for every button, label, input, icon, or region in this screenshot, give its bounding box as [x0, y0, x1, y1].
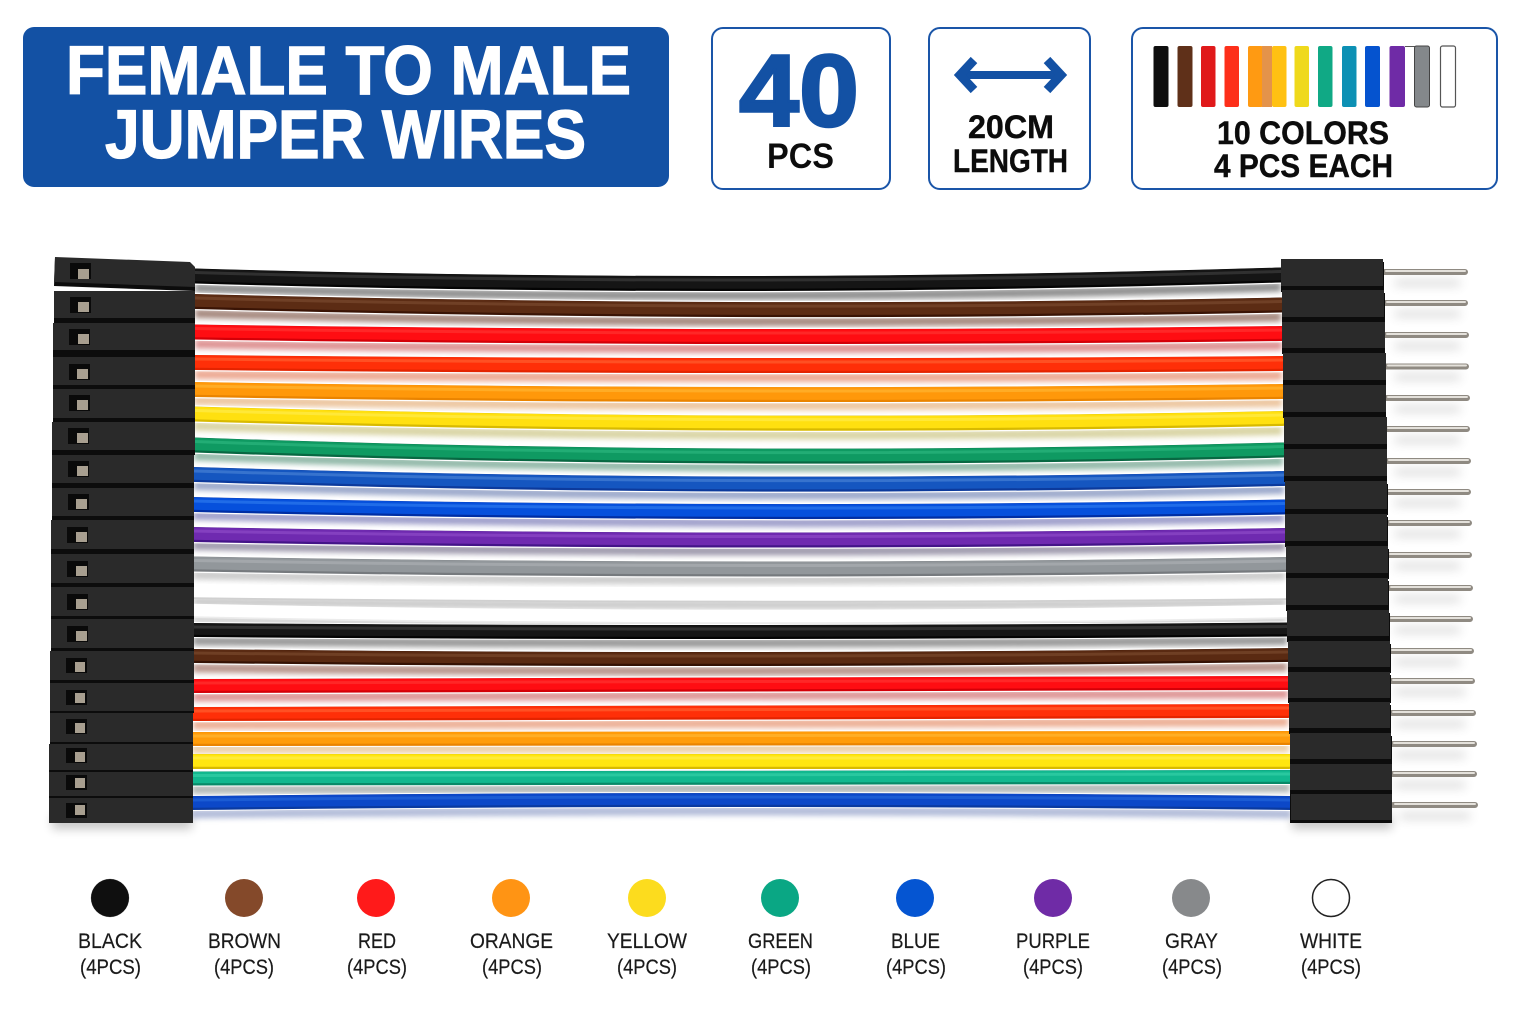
- cast shadows: [52, 283, 1470, 829]
- legend: orange: (4PCS): [482, 956, 542, 979]
- legend: brown: BROWN: [208, 930, 281, 953]
- title banner: [23, 27, 669, 187]
- legend: white: [1300, 880, 1362, 979]
- legend: yellow: (4PCS): [617, 956, 677, 979]
- legend: brown: [208, 879, 281, 979]
- wire: orange: [194, 386, 1282, 395]
- legend: white: (4PCS): [1301, 956, 1361, 979]
- connector 4: [53, 357, 195, 389]
- wire: white second: [193, 610, 1286, 617]
- wire: orange red: [195, 359, 1282, 366]
- color legend: [78, 879, 1362, 979]
- legend: brown: (4PCS): [214, 956, 274, 979]
- legend: blue: [886, 879, 946, 979]
- legend: yellow: [607, 879, 687, 979]
- legend: blue: BLUE: [891, 930, 940, 953]
- legend: green: [748, 879, 813, 979]
- connector 11: [51, 587, 194, 619]
- connector 14: [50, 683, 194, 713]
- legend: orange: ORANGE: [470, 930, 553, 953]
- legend: red: [347, 879, 407, 979]
- connector 2: [54, 291, 195, 323]
- connector 12: [51, 619, 194, 651]
- wire: blue last: [191, 797, 1291, 803]
- legend: red: RED: [358, 930, 396, 953]
- wire: gray: [193, 560, 1285, 569]
- wire: red: [195, 328, 1282, 337]
- length text: LENGTH: [953, 143, 1068, 179]
- legend: red: (4PCS): [347, 956, 407, 979]
- connector 16: [49, 744, 193, 772]
- panel: colors: [1132, 28, 1497, 189]
- colors text: 10 COLORS: [1217, 115, 1389, 151]
- colors text: 4 PCS EACH: [1214, 148, 1393, 184]
- legend: black: [78, 879, 142, 979]
- legend: orange: [470, 879, 553, 979]
- connector 10: [51, 554, 194, 587]
- legend: gray: (4PCS): [1162, 956, 1222, 979]
- wire: purple: [193, 531, 1285, 540]
- wires bundle: [191, 272, 1291, 803]
- wire: orange second: [192, 735, 1289, 739]
- panel: quantity: 40: [739, 34, 859, 148]
- wire: red second: [193, 680, 1288, 686]
- connector 3: [53, 323, 195, 357]
- connector 7: [52, 455, 194, 488]
- wire: orange red second: [193, 708, 1288, 714]
- wire: black second: [193, 626, 1287, 632]
- panel: quantity: [712, 28, 890, 189]
- wire: brown: [195, 298, 1281, 310]
- wire: green light: [192, 774, 1290, 778]
- legend: purple: PURPLE: [1016, 930, 1090, 953]
- connector 15: [50, 713, 193, 744]
- wire: green: [194, 442, 1283, 456]
- connector 17: [49, 772, 193, 798]
- wire: brown second: [193, 652, 1287, 659]
- wire: bright blue: [193, 501, 1284, 512]
- title banner: JUMPER WIRES: [105, 96, 586, 173]
- title banner: FEMALE TO MALE: [66, 32, 631, 109]
- connector 18: [49, 798, 193, 823]
- wire: white: [193, 590, 1286, 595]
- connector 13: [50, 651, 194, 683]
- connector 5: [53, 389, 195, 422]
- length text: 20CM: [968, 109, 1054, 145]
- legend: blue: (4PCS): [886, 956, 946, 979]
- male pins: [1384, 271, 1475, 805]
- wire: yellow second: [192, 758, 1289, 762]
- legend: black: BLACK: [78, 930, 142, 953]
- connector 6: [52, 422, 195, 455]
- right connectors: [1281, 259, 1392, 823]
- legend: yellow: YELLOW: [607, 930, 687, 953]
- panel: quantity: PCS: [767, 137, 834, 176]
- legend: purple: (4PCS): [1023, 956, 1083, 979]
- connector 9: [51, 520, 194, 554]
- connector 8: [52, 488, 194, 520]
- connector 1: [54, 257, 195, 291]
- legend: gray: [1162, 879, 1222, 979]
- wire: black: [195, 272, 1281, 284]
- left connectors: [49, 257, 195, 823]
- length text: [953, 109, 1068, 179]
- legend: green: (4PCS): [751, 956, 811, 979]
- legend: purple: [1016, 879, 1090, 979]
- color swatches: [1154, 46, 1456, 107]
- wire: blue: [194, 471, 1284, 484]
- legend: green: GREEN: [748, 930, 813, 953]
- legend: gray: GRAY: [1165, 930, 1218, 953]
- icon: double arrow: [960, 60, 1061, 90]
- wire: yellow: [194, 410, 1282, 423]
- legend: black: (4PCS): [80, 956, 141, 979]
- panel: length: [929, 28, 1090, 189]
- legend: white: WHITE: [1300, 930, 1362, 953]
- colors text: [1214, 115, 1393, 184]
